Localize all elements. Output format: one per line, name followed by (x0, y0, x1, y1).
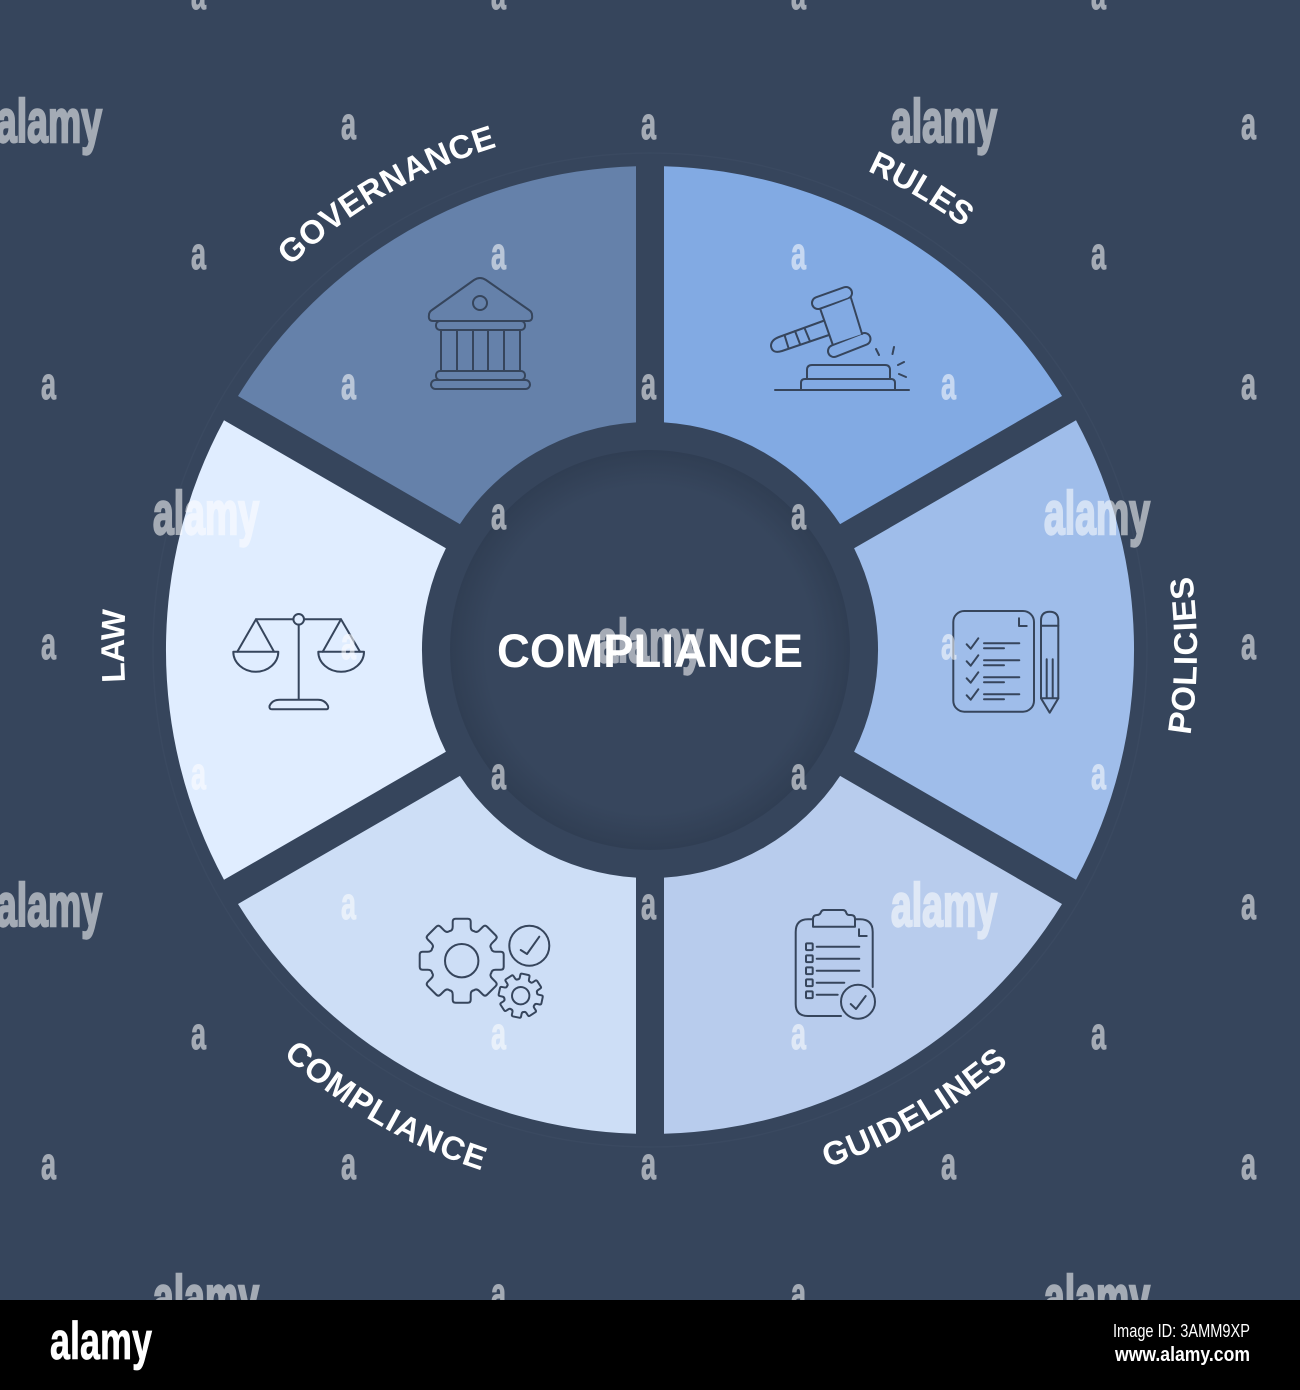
watermarks: a (191, 1008, 207, 1059)
label: policies: POLICIES (1168, 578, 1198, 734)
watermarks: a (491, 488, 507, 539)
watermarks: a (41, 1138, 57, 1189)
footer bar: Image ID: 3AMM9XP (1113, 1321, 1250, 1341)
watermarks: alamy (1044, 480, 1150, 547)
footer bar: www.alamy.com (1114, 1344, 1250, 1366)
watermarks: alamy (597, 608, 703, 675)
watermarks: a (791, 1008, 807, 1059)
segment: compliance (238, 776, 636, 1134)
watermarks: a (641, 1138, 657, 1189)
watermarks: a (641, 358, 657, 409)
watermarks: a (341, 358, 357, 409)
watermarks: alamy (153, 480, 259, 547)
watermarks: a (941, 358, 957, 409)
watermarks: alamy (153, 1264, 259, 1331)
watermarks: a (941, 618, 957, 669)
watermarks: a (1091, 228, 1107, 279)
watermarks: a (641, 98, 657, 149)
center hub circle (450, 450, 850, 850)
watermarks: a (1241, 878, 1257, 929)
label: law: LAW (101, 609, 126, 681)
watermarks: a (1091, 748, 1107, 799)
watermarks: a (1241, 1138, 1257, 1189)
watermarks: a (341, 878, 357, 929)
watermarks: a (341, 98, 357, 149)
label: compliance: COMPLIANCE (288, 1043, 487, 1170)
watermarks: a (491, 1268, 507, 1319)
footer bar: alamy (50, 1312, 152, 1371)
segment: guidelines (664, 776, 1062, 1134)
watermarks: a (641, 878, 657, 929)
watermarks: a (791, 748, 807, 799)
icon: policy document and pencil (953, 611, 1058, 713)
label: rules: RULES (869, 151, 973, 224)
watermarks: a (41, 618, 57, 669)
watermarks: alamy (0, 872, 102, 939)
watermarks: a (941, 1138, 957, 1189)
watermarks: a (341, 1138, 357, 1189)
icon: government building (429, 278, 532, 389)
segment: governance (238, 166, 636, 524)
watermarks: alamy (0, 88, 102, 155)
watermarks: a (491, 748, 507, 799)
label: governance: GOVERNANCE (280, 126, 496, 262)
watermarks: a (791, 488, 807, 539)
watermarks: a (491, 228, 507, 279)
watermarks: a (41, 358, 57, 409)
watermarks: a (191, 228, 207, 279)
watermarks: a (191, 748, 207, 799)
icon: clipboard checklist (796, 910, 875, 1019)
icon: gavel (771, 293, 909, 390)
segment: law (166, 420, 446, 880)
watermarks: a (1091, 1008, 1107, 1059)
watermarks: a (491, 1008, 507, 1059)
watermarks: a (791, 228, 807, 279)
footer bar (0, 1300, 1300, 1390)
center title: COMPLIANCE (497, 624, 803, 677)
icon: scales (233, 614, 364, 709)
watermarks: a (791, 1268, 807, 1319)
watermarks: alamy (891, 872, 997, 939)
watermarks: a (1241, 358, 1257, 409)
segment: rules (664, 166, 1062, 524)
icon: gears with check (420, 919, 549, 1022)
watermarks: alamy (891, 88, 997, 155)
watermarks: a (341, 618, 357, 669)
watermarks: a (1241, 98, 1257, 149)
segment: policies (854, 420, 1134, 880)
label: guidelines: GUIDELINES (824, 1049, 1006, 1164)
watermarks: a (1241, 618, 1257, 669)
wheel outer edge (153, 153, 1147, 1147)
watermarks: alamy (1044, 1264, 1150, 1331)
